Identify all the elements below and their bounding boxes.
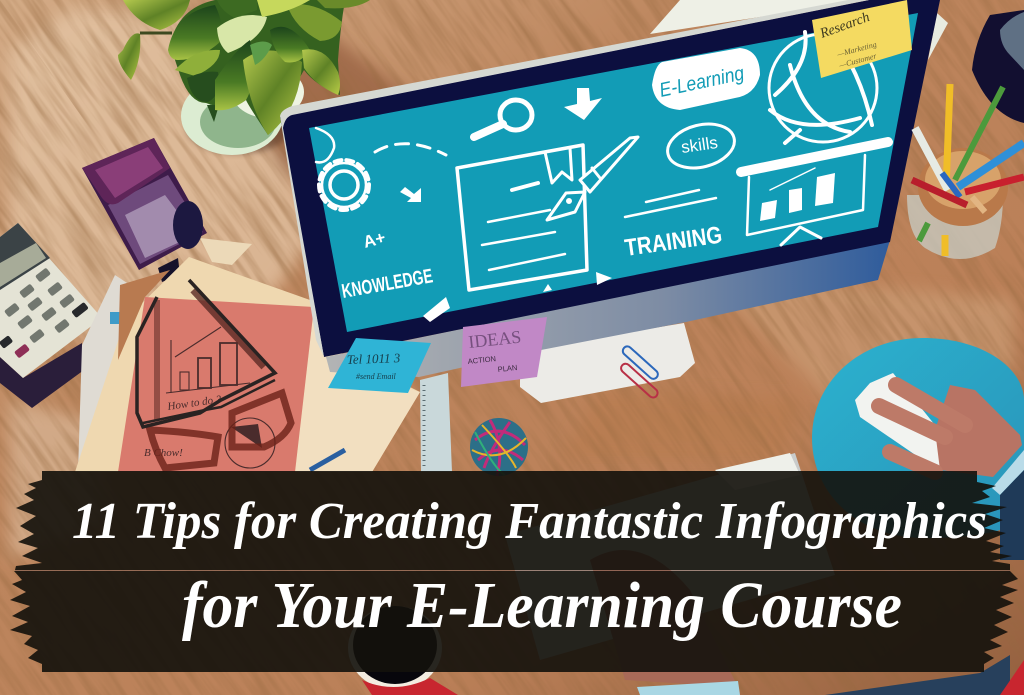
globe (769, 32, 877, 143)
screen labels: TRAINING (623, 222, 724, 262)
blue pencil on notebook (310, 450, 345, 470)
icon: down arrow (564, 88, 602, 120)
icon: small arrow (400, 187, 421, 202)
sticky note: Research (812, 0, 912, 78)
sticky note: Ideas: PLAN (497, 363, 518, 374)
sticky note: Tel: #send Email (356, 372, 397, 381)
leather wallet (82, 138, 252, 282)
sticky note: Ideas: ACTION (467, 354, 496, 366)
monitor stand (520, 323, 695, 403)
coffee cup (348, 606, 458, 695)
pink sketch paper: How to do ? (166, 393, 222, 413)
computer mouse (855, 373, 947, 467)
chart bars (760, 200, 777, 221)
dashed arc (375, 144, 446, 155)
plant leaves (118, 0, 370, 135)
screen icons (316, 32, 888, 290)
pen (547, 137, 638, 220)
sticky note: Research: Research (817, 10, 872, 42)
plant pot and saucer (181, 66, 304, 155)
pink sketch paper: B Chow! (144, 447, 183, 459)
white paper behind monitor (650, 0, 948, 60)
blue mouse pad (812, 338, 1024, 538)
sticky note: Research: —Customer (837, 51, 878, 70)
screen labels: skills (680, 133, 719, 157)
calculator (0, 223, 102, 408)
screen labels: A+ (361, 228, 388, 252)
pencil jar (907, 84, 1024, 259)
sticky note: Tel: Tel 1011 3 (347, 350, 401, 367)
screen arrow fragments (423, 297, 450, 322)
sketched chart (166, 327, 275, 468)
monitor chin (326, 240, 890, 377)
sticky note: Ideas (461, 317, 547, 387)
dark bottle with shadow (972, 10, 1024, 123)
icon: gears (316, 128, 369, 210)
screen labels: E-Learning (657, 62, 746, 102)
E-Learning bubble (652, 48, 760, 110)
hand on mouse (879, 385, 1024, 560)
ruler (420, 373, 452, 472)
sticky note: Research: —Marketing (835, 40, 878, 59)
paper clips (619, 345, 660, 399)
sticky note: Tel (328, 338, 431, 393)
keyboard (505, 453, 835, 660)
dense leaf mass (170, 0, 345, 135)
document (457, 145, 587, 290)
icon: magnifying glass (474, 100, 532, 137)
screen (309, 13, 918, 332)
screen labels: KNOWLEDGE (340, 265, 434, 303)
subtitle: for Your E-Learning Course (182, 569, 902, 642)
eyeglasses with shadow (137, 280, 291, 468)
training lines (625, 190, 716, 217)
projector board (741, 142, 888, 245)
title: 11 Tips for Creating Fantastic Infographics (72, 493, 987, 550)
monitor (280, 0, 940, 377)
screen labels (340, 62, 746, 303)
rubber band ball (470, 418, 528, 476)
papers and notebook stack (75, 257, 420, 472)
sticky note: Ideas: IDEAS (467, 327, 522, 352)
hand and sleeve at bottom (590, 550, 1024, 695)
dark banner (10, 471, 1018, 672)
pink sketch paper (118, 297, 314, 472)
